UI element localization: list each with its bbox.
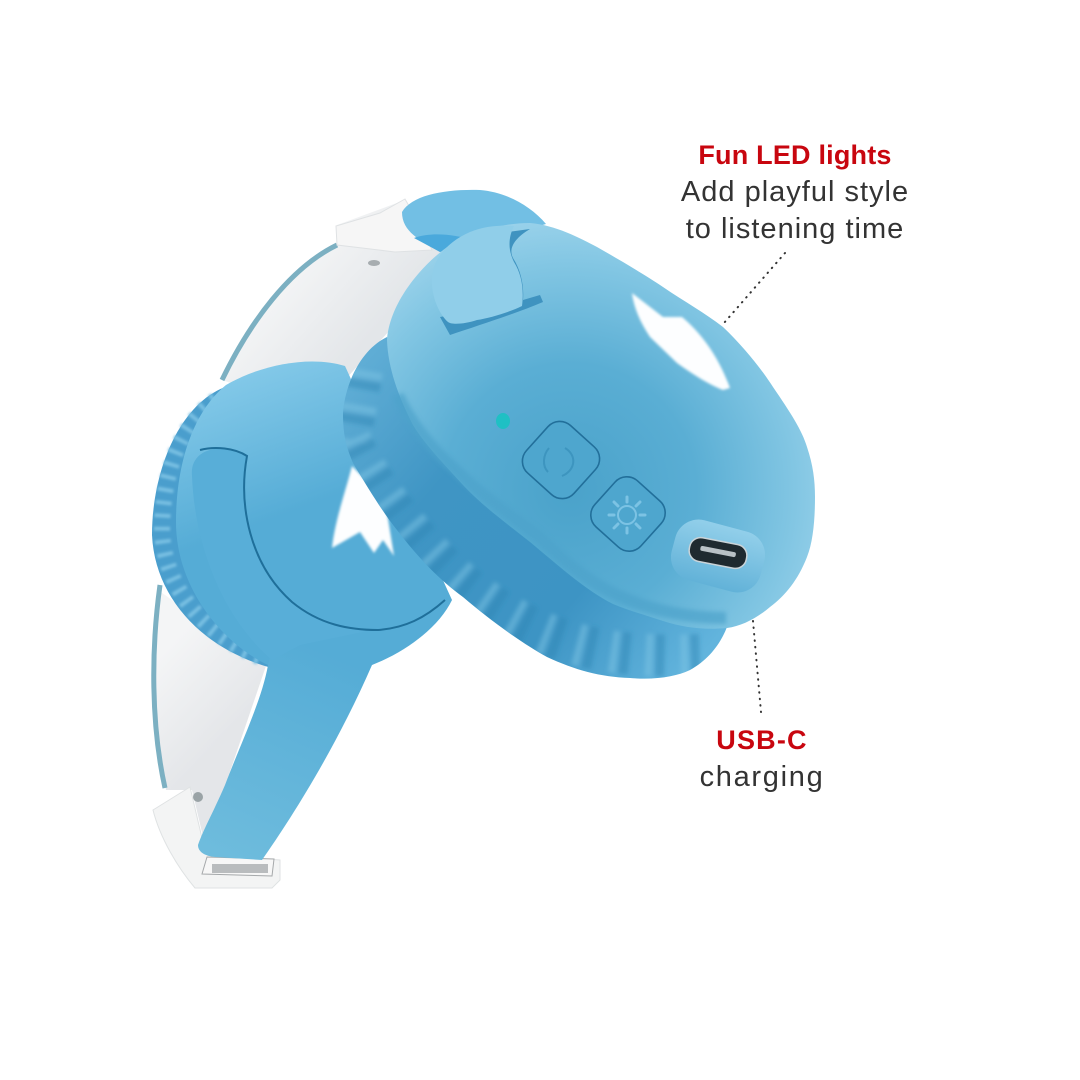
power button xyxy=(516,415,606,505)
top hinge screw hole xyxy=(368,260,380,266)
lower fabric cord xyxy=(154,585,165,788)
left stem xyxy=(198,610,395,860)
left cup housing xyxy=(176,361,452,665)
LED star left xyxy=(332,466,394,556)
top arm shaded inner xyxy=(414,234,470,252)
left crescent xyxy=(192,449,372,660)
top blue arm xyxy=(402,190,546,252)
LED star right xyxy=(632,293,730,390)
bottom white hinge xyxy=(153,787,280,888)
headband lower white section xyxy=(155,590,268,845)
headband upper white section xyxy=(222,200,445,400)
hinge knob xyxy=(432,226,523,324)
cup lower rim band xyxy=(398,395,726,618)
big ear pad xyxy=(343,337,727,679)
big cup housing xyxy=(387,223,815,629)
big pad ribs xyxy=(350,370,700,656)
leader line: USB-C xyxy=(753,621,761,712)
callout line two: to listening time xyxy=(686,213,904,245)
bottom hinge slot highlight xyxy=(212,864,268,873)
USB-C port xyxy=(666,514,770,598)
callout line one: Add playful style xyxy=(681,176,909,208)
upper fabric cord xyxy=(222,245,337,380)
hinge slot shadow xyxy=(440,229,543,335)
left ear pad xyxy=(152,386,300,668)
headphones illustration xyxy=(151,190,815,888)
top white hinge xyxy=(336,199,432,252)
left crescent separator line xyxy=(200,448,445,630)
leader line: LED lights xyxy=(724,253,785,323)
bottom hinge slot xyxy=(202,857,274,876)
brightness button xyxy=(584,470,672,558)
callout heading: USB-C xyxy=(716,725,808,755)
status LED xyxy=(496,413,510,429)
callout: USB-C charging xyxy=(700,725,824,793)
callout heading: Fun LED lights xyxy=(698,140,892,170)
bottom hinge screw xyxy=(193,792,203,802)
left pad ribs xyxy=(162,400,262,658)
callout: Fun LED lights xyxy=(681,140,909,245)
callout line one: charging xyxy=(700,761,824,793)
